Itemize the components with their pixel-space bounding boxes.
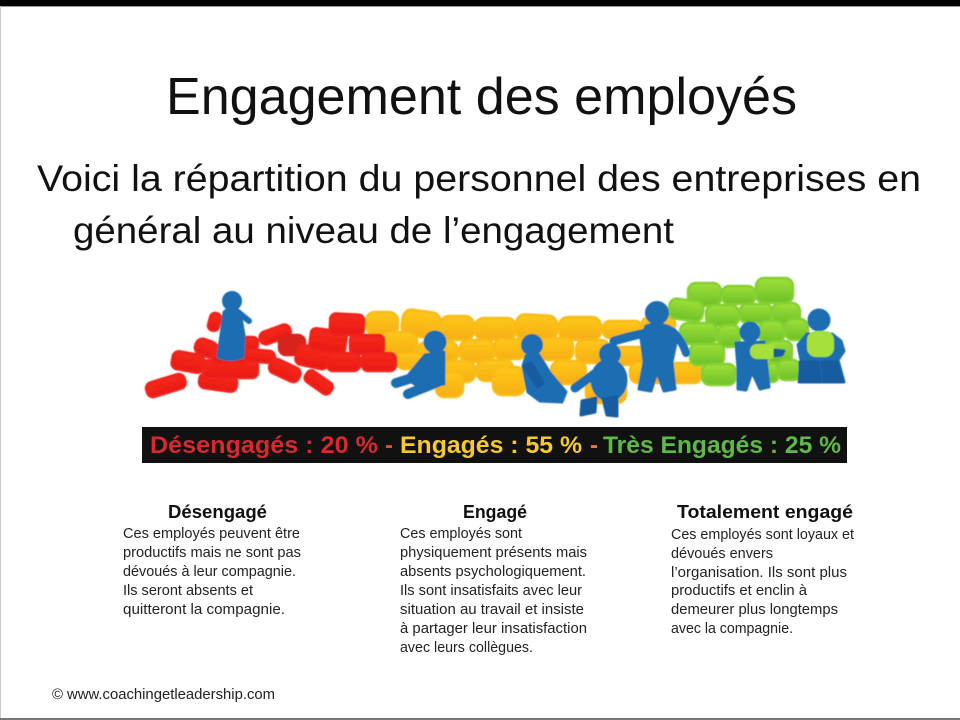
green bricks — [668, 278, 808, 385]
column: Engagé: à partager leur insatisfaction — [400, 621, 587, 637]
column: Désengagé: Ces employés peuvent être — [123, 526, 300, 542]
figure: standing, arm on shoulder — [614, 302, 686, 391]
column: Totalement engagé: avec la compagnie. — [671, 621, 793, 637]
column: Engagé: situation au travail et insiste — [400, 602, 584, 618]
banner: percentages: Engagés : 55 % — [400, 432, 582, 459]
title: Engagement des employés — [166, 68, 797, 126]
intro text: général au niveau de l’engagement — [73, 210, 675, 251]
column: Totalement engagé: Totalement engagé — [677, 502, 853, 522]
banner: percentages: Désengagés : 20 % — [150, 432, 378, 459]
column: Totalement engagé: l’organisation. Ils sont plus — [671, 565, 847, 581]
illustration: plasticine wall and figures — [145, 278, 844, 416]
red bricks — [145, 312, 396, 399]
column: Désengagé: Ils seront absents et — [123, 583, 253, 599]
column: Totalement engagé — [671, 502, 854, 637]
column: Désengagé — [123, 502, 301, 618]
column: Engagé: Engagé — [463, 502, 527, 522]
figure: holding green brick right — [798, 310, 844, 382]
column: Engagé: physiquement présents mais — [400, 545, 587, 561]
column: Engagé: avec leurs collègues. — [400, 640, 533, 656]
footer: copyright: © www.coachingetleadership.com — [52, 687, 275, 703]
figure: standing on rubble — [218, 292, 249, 360]
banner: percentages: - — [385, 432, 393, 459]
column: Désengagé: dévoués à leur compagnie. — [123, 564, 296, 580]
intro text — [37, 158, 921, 251]
intro text: Voici la répartition du personnel des entreprises en — [37, 158, 921, 199]
column: Engagé: Ils sont insatisfaits avec leur — [400, 583, 582, 599]
column: Totalement engagé: productifs et enclin à — [671, 583, 808, 599]
figure: carrying green brick — [736, 323, 784, 390]
column: Engagé — [400, 502, 587, 656]
column: Totalement engagé: demeurer plus longtemps — [671, 602, 838, 618]
column: Totalement engagé: dévoués envers — [671, 546, 773, 562]
column: Engagé: Ces employés sont — [400, 526, 522, 542]
figure: crouching, comforted — [575, 344, 626, 416]
column: Désengagé: productifs mais ne sont pas — [123, 545, 301, 561]
yellow bricks — [366, 308, 702, 403]
column: Totalement engagé: Ces employés sont loyaux et — [671, 527, 854, 543]
column: Désengagé: quitteront la compagnie. — [123, 602, 285, 618]
banner: percentages: Très Engagés : 25 % — [603, 432, 841, 459]
banner: percentages — [142, 427, 847, 463]
banner: percentages: - — [590, 432, 598, 459]
column: Engagé: absents psychologiquement. — [400, 564, 586, 580]
column: Désengagé: Désengagé — [168, 502, 267, 522]
figure: sitting left — [396, 332, 445, 394]
figure: sitting middle — [522, 336, 566, 402]
